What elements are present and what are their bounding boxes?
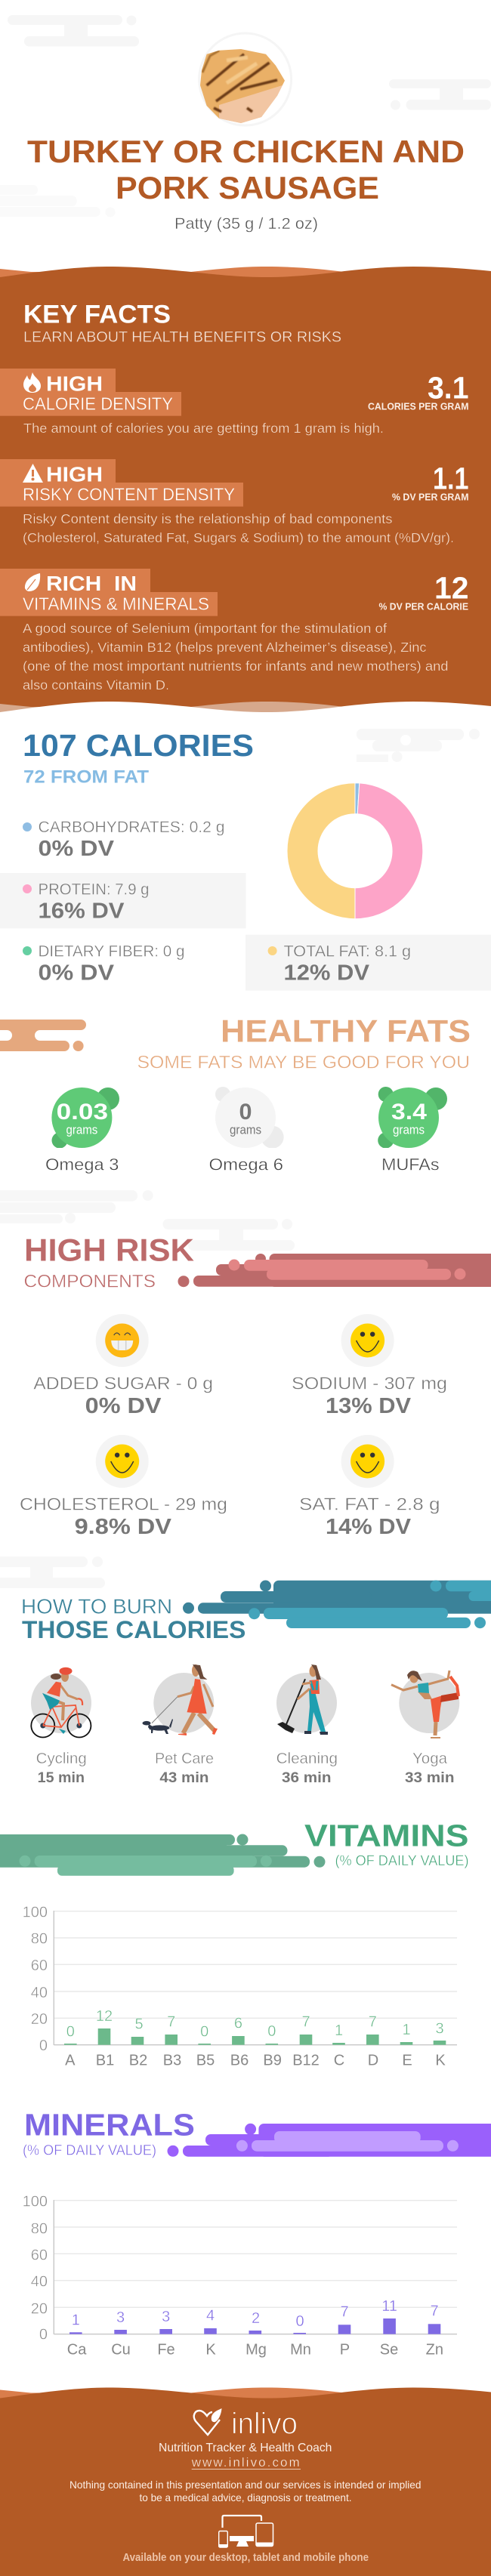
metric: omega 6: 0 <box>239 1100 252 1124</box>
bar chart: minerals: 0 <box>39 2327 48 2343</box>
title: TURKEY OR CHICKEN AND <box>27 134 465 169</box>
bar chart: vitamins: 7 <box>369 2013 377 2030</box>
bar chart: vitamins: 6 <box>234 2016 242 2032</box>
icon: person sweeping <box>277 1664 328 1735</box>
legend: carbohydrates: CARBOHYDRATES: 0.2 g <box>38 819 225 836</box>
panel: high risk components <box>20 1232 491 1539</box>
bar chart: minerals: Mg <box>246 2341 267 2358</box>
panel: calories <box>0 728 491 991</box>
bar chart: vitamins: B1 <box>96 2052 114 2069</box>
component: added sugar <box>33 1314 213 1418</box>
subheading: components: COMPONENTS <box>24 1271 156 1291</box>
bar chart: vitamins: K <box>435 2052 446 2069</box>
component: saturated fat: SAT. FAT - 2.8 g <box>299 1494 440 1513</box>
disclaimer: to be a medical advice, diagnosis or treatment. <box>139 2491 352 2504</box>
bar chart: vitamins: 80 <box>31 1930 48 1947</box>
bar chart: minerals: 0 <box>295 2313 304 2330</box>
bar chart: minerals: 100 <box>23 2194 48 2210</box>
fact: calorie density <box>0 369 468 436</box>
legend: protein: PROTEIN: 7.9 g <box>38 881 150 898</box>
legend: protein: 16% DV <box>38 899 125 923</box>
metric: omega 3 <box>45 1087 119 1174</box>
bar chart: minerals <box>23 2194 457 2358</box>
icon: person in dancer pose <box>391 1671 459 1738</box>
activity: pet care <box>142 1664 218 1786</box>
component: saturated fat: 14% DV <box>326 1515 412 1539</box>
fact: calorie density: CALORIES PER GRAM <box>368 402 468 412</box>
panel: vitamins <box>0 1818 468 2069</box>
bar chart: minerals: 7 <box>430 2303 439 2320</box>
bar chart: vitamins: B6 <box>230 2052 249 2069</box>
heading: high risk: HIGH RISK <box>24 1232 194 1267</box>
fact: calorie density: The amount of calories you are getting from 1 gram is high. <box>23 421 384 436</box>
component: cholesterol: 9.8% DV <box>75 1515 172 1539</box>
bar chart: vitamins: A <box>65 2052 76 2069</box>
fact: rich in vitamins and minerals: antibodies), Vitamin B12 (helps prevent Alzheimer’s disease), Zinc <box>23 640 427 655</box>
fact: rich in vitamins and minerals: A good source of Selenium (important for the stimulation of <box>23 621 387 636</box>
title: PORK SAUSAGE <box>116 170 379 205</box>
bar chart: vitamins: B5 <box>196 2052 215 2069</box>
metric: omega 3: grams <box>66 1124 97 1137</box>
decorative cloud: minerals <box>168 2124 491 2157</box>
metric: MUFAs: MUFAs <box>381 1155 440 1174</box>
bar chart: minerals: 3 <box>162 2309 170 2325</box>
fact: rich in vitamins and minerals: VITAMINS & MINERALS <box>23 594 209 614</box>
bar chart: minerals: 7 <box>340 2304 349 2321</box>
fact: risky content density <box>0 459 468 545</box>
bar chart: minerals: 40 <box>31 2274 48 2291</box>
fact: rich in vitamins and minerals: % DV PER CALORIE <box>379 602 468 612</box>
bar chart: minerals: P <box>340 2341 350 2358</box>
legend: total fat <box>246 935 491 991</box>
bar chart: minerals: Fe <box>157 2341 175 2358</box>
logo: inlivo: inlivo <box>231 2408 298 2441</box>
heading: minerals: MINERALS <box>24 2108 195 2143</box>
fact: rich in vitamins and minerals: (one of the most important nutrients for infants and new mothers) and <box>23 659 449 674</box>
icon: smiling face <box>105 1444 139 1479</box>
bar chart: minerals: K <box>205 2341 216 2358</box>
metric: MUFAs: 3.4 <box>391 1100 427 1124</box>
icon: dog walker <box>142 1664 218 1735</box>
fact: rich in vitamins and minerals: RICH IN <box>46 572 137 595</box>
activity: yoga <box>391 1671 459 1786</box>
fact: rich in vitamins and minerals: also contains Vitamin D. <box>23 677 169 693</box>
decorative cloud: burn <box>183 1580 491 1628</box>
fact: risky content density: HIGH <box>46 463 103 486</box>
donut chart <box>287 783 423 919</box>
legend: carbohydrates <box>23 819 225 861</box>
subheading: healthy fats: SOME FATS MAY BE GOOD FOR YOU <box>137 1052 470 1072</box>
panel: footer <box>0 2388 491 2576</box>
bar chart: minerals: Zn <box>426 2341 443 2358</box>
legend: dietary fiber: 0% DV <box>38 961 115 986</box>
fact: risky content density: (Cholesterol, Saturated Fat, Sugars & Sodium) to the amount (%DV/gr). <box>23 530 454 545</box>
activity: cycling <box>31 1667 91 1786</box>
component: saturated fat <box>299 1435 440 1539</box>
activity: cleaning: 36 min <box>282 1770 331 1786</box>
legend: protein <box>0 873 246 928</box>
bar chart: vitamins: 60 <box>31 1957 48 1974</box>
bar chart: vitamins: 12 <box>96 2008 113 2025</box>
subheading: key facts: LEARN ABOUT HEALTH BENEFITS OR RISKS <box>23 330 341 346</box>
bar chart: minerals: 4 <box>206 2307 215 2324</box>
bar chart: vitamins: B9 <box>263 2052 282 2069</box>
website link: www.inlivo.com <box>191 2455 300 2470</box>
bar chart: minerals: 60 <box>31 2247 48 2263</box>
activity: yoga: 33 min <box>405 1770 455 1786</box>
icon: grinning face <box>105 1323 139 1358</box>
bar chart: vitamins: 100 <box>23 1904 48 1920</box>
bar chart: minerals: 80 <box>31 2220 48 2237</box>
bar chart: vitamins: 1 <box>335 2022 343 2039</box>
fact: rich in vitamins and minerals: 12 <box>434 571 468 606</box>
bar chart: vitamins: 0 <box>267 2023 276 2040</box>
bar chart: vitamins: 0 <box>66 2024 75 2041</box>
bar chart: vitamins: B3 <box>163 2052 181 2069</box>
bar chart: minerals: 2 <box>252 2310 260 2327</box>
panel: how to burn calories <box>21 1580 491 1786</box>
bar chart: vitamins <box>23 1904 457 2069</box>
bar chart: vitamins: 7 <box>301 2013 310 2030</box>
bar chart: vitamins: 20 <box>31 2011 48 2028</box>
fact: risky content density: Risky Content density is the relationship of bad components <box>23 511 393 526</box>
serving size subtitle: Patty (35 g / 1.2 oz) <box>174 214 318 233</box>
fact: calorie density: CALORIE DENSITY <box>23 394 173 414</box>
icon: cyclist <box>31 1667 91 1737</box>
legend: total fat: TOTAL FAT: 8.1 g <box>284 943 411 961</box>
icon: smiling face <box>350 1444 384 1479</box>
metric: MUFAs <box>378 1087 447 1174</box>
heading: vitamins: VITAMINS <box>304 1818 468 1853</box>
component: sodium: 13% DV <box>326 1394 412 1418</box>
decorative cloud: vitamins <box>0 1834 325 1876</box>
metric: omega 3: Omega 3 <box>45 1155 119 1174</box>
metric: MUFAs: grams <box>393 1124 425 1137</box>
bar chart: vitamins: B12 <box>292 2052 320 2069</box>
component: sodium <box>292 1314 447 1418</box>
subheading: percent of daily value: (% OF DAILY VALUE) <box>335 1853 468 1869</box>
legend: carbohydrates: 0% DV <box>38 837 115 861</box>
icon: smiling face <box>350 1323 384 1358</box>
icon: devices <box>219 2516 273 2547</box>
bar chart: vitamins: 0 <box>39 2038 48 2054</box>
component: added sugar: 0% DV <box>85 1394 162 1418</box>
bar chart: minerals: Mn <box>290 2341 311 2358</box>
bar chart: vitamins: 40 <box>31 1985 48 2001</box>
heading: those calories: THOSE CALORIES <box>22 1616 246 1643</box>
heading: healthy fats: HEALTHY FATS <box>221 1013 471 1048</box>
bar chart: minerals: 20 <box>31 2300 48 2317</box>
fact: rich in vitamins and minerals <box>0 569 468 693</box>
icon: warning triangle <box>23 464 43 483</box>
activity: cleaning: Cleaning <box>276 1751 338 1767</box>
activity: cycling: Cycling <box>36 1751 87 1767</box>
subheading: calories from fat: 72 FROM FAT <box>23 767 149 788</box>
disclaimer <box>69 2479 422 2504</box>
heading: calories: 107 CALORIES <box>23 728 254 763</box>
heading: how to burn: HOW TO BURN <box>21 1595 172 1618</box>
bar chart: vitamins: B2 <box>129 2052 147 2069</box>
decorative cloud: high risk <box>178 1254 491 1287</box>
component: added sugar: ADDED SUGAR - 0 g <box>33 1373 213 1393</box>
bar chart: vitamins: 3 <box>435 2020 444 2037</box>
bar chart: vitamins: 7 <box>167 2013 175 2030</box>
bar chart: minerals: Se <box>380 2341 398 2358</box>
bar chart: minerals: 1 <box>72 2312 80 2328</box>
fact: risky content density: 1.1 <box>433 461 468 496</box>
bar chart: vitamins: 1 <box>402 2022 411 2038</box>
fact: calorie density: HIGH <box>46 372 103 396</box>
panel: key facts <box>0 267 491 725</box>
fact: risky content density: RISKY CONTENT DENSITY <box>23 485 235 504</box>
disclaimer: Nothing contained in this presentation and our services is intended or implied <box>69 2479 422 2491</box>
activity: cycling: 15 min <box>38 1770 85 1786</box>
activity: cleaning <box>276 1664 338 1786</box>
icon: flame <box>23 372 41 393</box>
metric: omega 6 <box>208 1087 284 1174</box>
component: sodium: SODIUM - 307 mg <box>292 1373 447 1393</box>
header: food photo <box>196 33 292 128</box>
fact: calorie density: 3.1 <box>428 371 468 406</box>
bar chart: vitamins: C <box>334 2052 344 2069</box>
component: cholesterol <box>20 1435 227 1539</box>
metric: omega 6: Omega 6 <box>208 1155 283 1174</box>
fact: risky content density: % DV PER GRAM <box>392 492 468 503</box>
legend: dietary fiber: DIETARY FIBER: 0 g <box>38 943 184 961</box>
activity: pet care: Pet Care <box>155 1751 214 1767</box>
activity: yoga: Yoga <box>412 1751 448 1767</box>
bar chart: vitamins: 5 <box>134 2016 144 2033</box>
bar chart: vitamins: E <box>402 2052 412 2069</box>
bar chart: minerals: 3 <box>116 2309 125 2326</box>
legend: total fat: 12% DV <box>284 961 370 986</box>
bar chart: vitamins: D <box>368 2052 378 2069</box>
subheading: percent of daily value: (% OF DAILY VALUE) <box>23 2143 156 2158</box>
heading: key facts: KEY FACTS <box>23 301 171 329</box>
bar chart: vitamins: 0 <box>200 2024 208 2041</box>
panel: healthy fats <box>0 1013 471 1174</box>
icon: leaf <box>25 573 40 591</box>
bar chart: minerals: 11 <box>381 2298 397 2315</box>
activity: pet care: 43 min <box>159 1770 208 1786</box>
availability note: Available on your desktop, tablet and mobile phone <box>122 2552 369 2564</box>
metric: omega 3: 0.03 <box>57 1100 108 1124</box>
panel: minerals <box>23 2108 491 2358</box>
bar chart: minerals: Ca <box>67 2341 87 2358</box>
logo: inlivo <box>194 2408 298 2441</box>
tagline: Nutrition Tracker & Health Coach <box>159 2442 332 2454</box>
bar chart: minerals: Cu <box>111 2341 131 2358</box>
metric: omega 6: grams <box>230 1124 261 1137</box>
title <box>27 134 465 205</box>
component: cholesterol: CHOLESTEROL - 29 mg <box>20 1494 227 1513</box>
decorative cloud: healthy fats <box>0 1020 86 1051</box>
legend: dietary fiber <box>23 943 184 986</box>
